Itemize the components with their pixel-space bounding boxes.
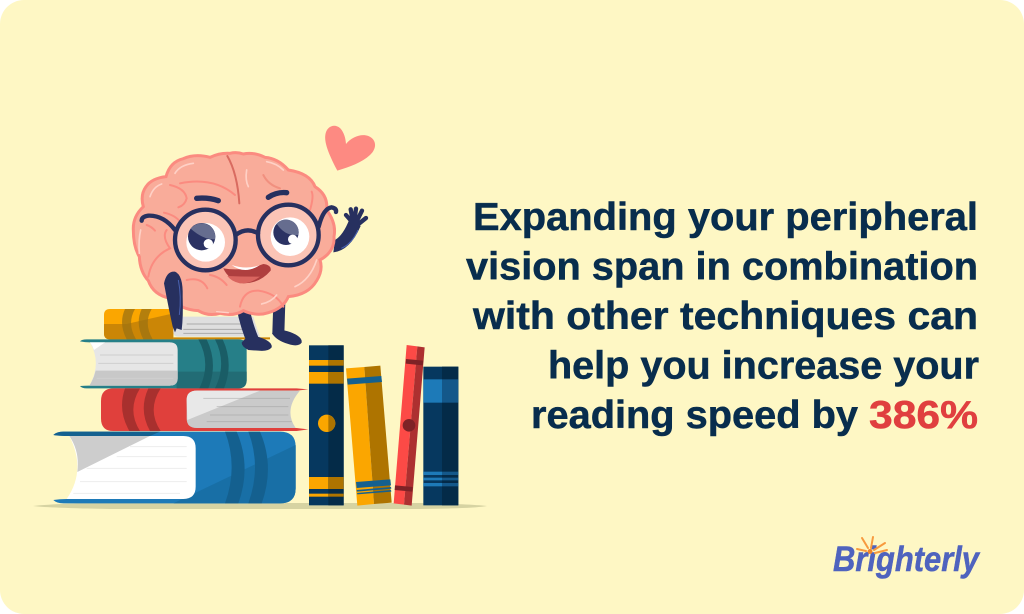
illustration: stacked books: [53, 309, 308, 503]
eye: right: [259, 206, 318, 264]
main statement text: [466, 196, 979, 437]
book: teal: [80, 339, 247, 388]
logo: Brighterly: [833, 537, 980, 579]
logo wordmark: Brighterly: [833, 540, 980, 579]
ground shadow: [33, 503, 487, 509]
logo sun rays: [857, 537, 887, 553]
line 3: with other techniques can: [472, 295, 978, 338]
book: red tilted: [394, 345, 425, 506]
icon: heart: [325, 126, 375, 171]
book: navy with orange bands: [309, 345, 344, 505]
eyebrows: [197, 193, 287, 201]
book: orange tilted: [346, 366, 392, 506]
highlighted figure: 386%: [869, 394, 978, 437]
illustration: brain character: [133, 126, 375, 351]
book: blue bottom: [53, 432, 296, 503]
eye: left: [176, 211, 235, 269]
line 1: Expanding your peripheral: [473, 196, 978, 239]
book: red: [101, 388, 308, 431]
left arm: [164, 272, 183, 332]
book: blue upright: [423, 367, 458, 505]
illustration: upright books: [309, 345, 458, 506]
logo sun: [868, 549, 872, 554]
brain body: [133, 153, 335, 315]
line 2: vision span in combination: [466, 246, 978, 288]
line 4: help you increase your: [548, 344, 979, 388]
brain folds: [139, 156, 317, 313]
mouth: [223, 264, 271, 283]
glasses: [142, 205, 336, 270]
legs: [242, 302, 302, 351]
book: orange top: [104, 309, 270, 339]
line 5: reading speed by: [531, 394, 859, 437]
waving arm and hand: [333, 209, 366, 252]
